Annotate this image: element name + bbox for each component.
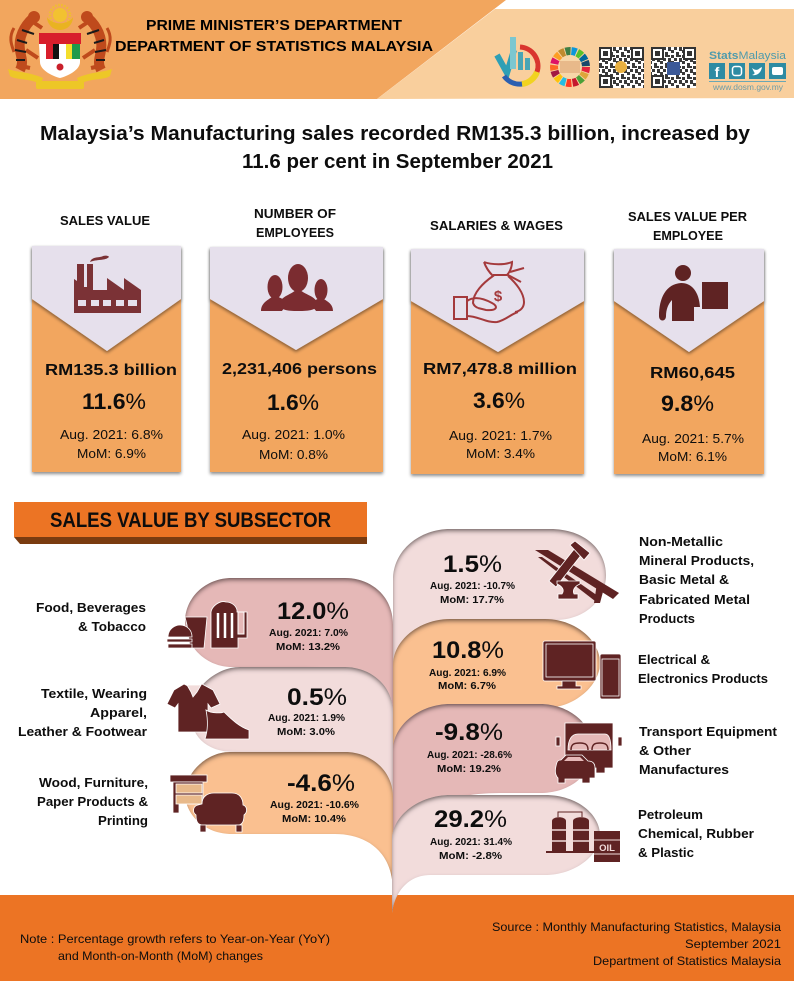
panel: number of employees: [210, 207, 383, 472]
subsector: petroleum, chemical, rubber and plastic: Chemical, Rubber: [638, 826, 754, 841]
icon: QR code website: [599, 47, 644, 88]
subsector: wood, furniture, paper and printing: [37, 770, 360, 832]
subsector: non-metallic, basic and fabricated metal: 1.5%: [443, 551, 502, 578]
subsector: petroleum, chemical, rubber and plastic: Petroleum: [638, 807, 703, 822]
heading: sales value by subsector: [14, 502, 367, 544]
panel: sales value: Aug. 2021: 6.8%: [60, 427, 163, 442]
panel: sales value per employee: MoM: 6.1%: [658, 449, 727, 464]
subsector: textile, apparel, leather and footwear: [18, 684, 347, 739]
subsector: petroleum, chemical, rubber and plastic: [430, 806, 754, 862]
subsector: non-metallic, basic and fabricated metal: Mineral Products,: [639, 553, 754, 568]
icon: nightstand and sofa: [170, 775, 247, 832]
subsector: textile, apparel, leather and footwear: Apparel,: [90, 705, 147, 720]
subsector: textile, apparel, leather and footwear: Textile, Wearing: [41, 686, 147, 701]
subsector: textile, apparel, leather and footwear: Aug. 2021: 1.9%: [268, 712, 346, 724]
icon: money bag in hand: [454, 262, 524, 322]
footer note: [20, 932, 330, 963]
subsector: food, beverages and tobacco: Aug. 2021: 7.0%: [269, 627, 349, 639]
subsector: non-metallic, basic and fabricated metal: Fabricated Metal: [639, 592, 750, 607]
icon: monitor and phone: [543, 641, 621, 699]
footer source: [492, 920, 781, 968]
panel: number of employees: Aug. 2021: 1.0%: [242, 427, 345, 442]
panel: salaries and wages: RM7,478.8 million: [423, 361, 577, 378]
subsector: non-metallic, basic and fabricated metal: Non-Metallic: [639, 534, 723, 549]
heading: sales value by subsector: SALES VALUE BY SUBSECTOR: [50, 509, 331, 532]
subsector: electrical and electronics: MoM: 6.7%: [438, 680, 497, 692]
subsector: non-metallic, basic and fabricated metal: Aug. 2021: -10.7%: [430, 580, 516, 592]
icon: person with box: [659, 265, 728, 321]
panel: sales value per employee: EMPLOYEE: [653, 229, 723, 243]
panel: sales value per employee: 9.8%: [661, 391, 714, 416]
subsector: food, beverages and tobacco: & Tobacco: [78, 619, 146, 634]
subsector: wood, furniture, paper and printing: -4.6%: [287, 770, 355, 797]
subsector: textile, apparel, leather and footwear: 0.5%: [287, 684, 347, 711]
header band: light: [377, 9, 794, 99]
subsector: petroleum, chemical, rubber and plastic: MoM: -2.8%: [439, 850, 503, 862]
panel: salaries and wages: Aug. 2021: 1.7%: [449, 428, 552, 443]
panel: sales value per employee: [614, 210, 764, 474]
header text: PRIME MINISTER’S DEPARTMENT: [146, 17, 402, 34]
subsector: food, beverages and tobacco: MoM: 13.2%: [276, 641, 341, 653]
subsector: textile, apparel, leather and footwear: MoM: 3.0%: [277, 726, 336, 738]
StatsMalaysia social block: www.dosm.gov.my: [712, 83, 783, 92]
subsector: non-metallic, basic and fabricated metal: Products: [639, 611, 695, 626]
dollar sign: $: [494, 288, 503, 305]
subsector: transport equipment and other manufactures: Aug. 2021: -28.6%: [427, 749, 513, 761]
subsector: petroleum, chemical, rubber and plastic: & Plastic: [638, 845, 694, 860]
subsector: transport equipment and other manufactures: Transport Equipment: [639, 724, 778, 739]
panel: salaries and wages: 3.6%: [473, 388, 525, 413]
icon: people: [261, 264, 333, 311]
icon: SDG wheel: [547, 44, 593, 90]
icon: QR code facebook: [651, 47, 696, 88]
subsector: non-metallic, basic and fabricated metal: Basic Metal &: [639, 572, 729, 587]
subsector: non-metallic, basic and fabricated metal: [430, 534, 754, 626]
subsector: food, beverages and tobacco: Food, Beverages: [36, 600, 146, 615]
panel: sales value per employee: RM60,645: [650, 365, 735, 382]
panel: number of employees: 2,231,406 persons: [222, 361, 377, 378]
icon: factory: [74, 256, 141, 313]
panel: sales value: MoM: 6.9%: [77, 446, 146, 461]
header text: DEPARTMENT OF STATISTICS MALAYSIA: [115, 38, 433, 55]
icon: oil tanks and barrel: [546, 812, 620, 862]
panel: sales value: 11.6%: [82, 389, 146, 414]
subsector: electrical and electronics: Aug. 2021: 6.9%: [429, 667, 507, 679]
subsector: transport equipment and other manufactures: -9.8%: [435, 719, 503, 746]
footer band: [0, 895, 794, 981]
footer source: September 2021: [685, 937, 781, 951]
panel: sales value: [32, 214, 181, 472]
panel: sales value per employee: SALES VALUE PER: [628, 210, 747, 224]
subsector: electrical and electronics: [429, 637, 768, 699]
subsector: electrical and electronics: 10.8%: [432, 637, 504, 664]
icon: bus and car: [555, 723, 622, 783]
panel: salaries and wages: [411, 219, 584, 474]
StatsMalaysia social block: [709, 50, 787, 92]
subsector: petroleum, chemical, rubber and plastic: 29.2%: [434, 806, 507, 833]
subsector: non-metallic, basic and fabricated metal: MoM: 17.7%: [440, 594, 505, 606]
footer source: Department of Statistics Malaysia: [593, 954, 781, 968]
StatsMalaysia social block: StatsMalaysia: [709, 50, 787, 62]
panel: salaries and wages: MoM: 3.4%: [466, 446, 535, 461]
title: Malaysia’s Manufacturing sales recorded RM135.3 billion, increased by: [40, 123, 751, 145]
subsector: wood, furniture, paper and printing: Wood, Furniture,: [39, 775, 148, 790]
subsector: electrical and electronics: Electrical &: [638, 652, 710, 667]
footer source: Source : Monthly Manufacturing Statistics, Malaysia: [492, 920, 781, 934]
panel: number of employees: EMPLOYEES: [256, 226, 334, 240]
icon: coat of arms: [8, 5, 112, 89]
subsector: electrical and electronics: Electronics Products: [638, 671, 768, 686]
subsector: transport equipment and other manufactures: MoM: 19.2%: [437, 763, 502, 775]
panel: right subsector shapes: [392, 529, 606, 913]
header band: orange: [0, 0, 506, 99]
title: [40, 123, 751, 173]
panel: sales value: RM135.3 billion: [45, 362, 177, 379]
icon: statistics anniversary logo: [497, 37, 538, 84]
subsector: wood, furniture, paper and printing: Paper Products &: [37, 794, 148, 809]
subsector: textile, apparel, leather and footwear: Leather & Footwear: [18, 724, 147, 739]
title: 11.6 per cent in September 2021: [242, 151, 553, 173]
icon: burger, cup and mug: [167, 602, 247, 648]
subsector: wood, furniture, paper and printing: Printing: [98, 813, 148, 828]
panel: number of employees: NUMBER OF: [254, 207, 336, 221]
subsector: wood, furniture, paper and printing: Aug. 2021: -10.6%: [270, 799, 360, 811]
panel: sales value: SALES VALUE: [60, 214, 150, 228]
subsector: transport equipment and other manufactures: [427, 719, 778, 783]
panel: number of employees: 1.6%: [267, 390, 319, 415]
panel: salaries and wages: SALARIES & WAGES: [430, 219, 563, 233]
subsector: transport equipment and other manufactures: & Other: [639, 743, 691, 758]
subsector: wood, furniture, paper and printing: MoM: 10.4%: [282, 813, 347, 825]
subsector: food, beverages and tobacco: [36, 598, 349, 653]
footer note: and Month-on-Month (MoM) changes: [58, 949, 263, 963]
panel: number of employees: MoM: 0.8%: [259, 447, 328, 462]
footer note: Note : Percentage growth refers to Year-on-Year (YoY): [20, 932, 330, 946]
subsector: petroleum, chemical, rubber and plastic: Aug. 2021: 31.4%: [430, 836, 513, 848]
header text: [115, 17, 433, 55]
icon: hammer, anvil and beams: [535, 541, 619, 603]
panel: sales value per employee: Aug. 2021: 5.7%: [642, 431, 744, 446]
StatsMalaysia social block: f: [715, 64, 720, 80]
icon: shirt and boot: [167, 684, 249, 739]
barrel label: OIL: [599, 843, 615, 854]
panel: left subsector shapes: [185, 578, 393, 892]
subsector: food, beverages and tobacco: 12.0%: [277, 598, 349, 625]
subsector: transport equipment and other manufactures: Manufactures: [639, 762, 729, 777]
